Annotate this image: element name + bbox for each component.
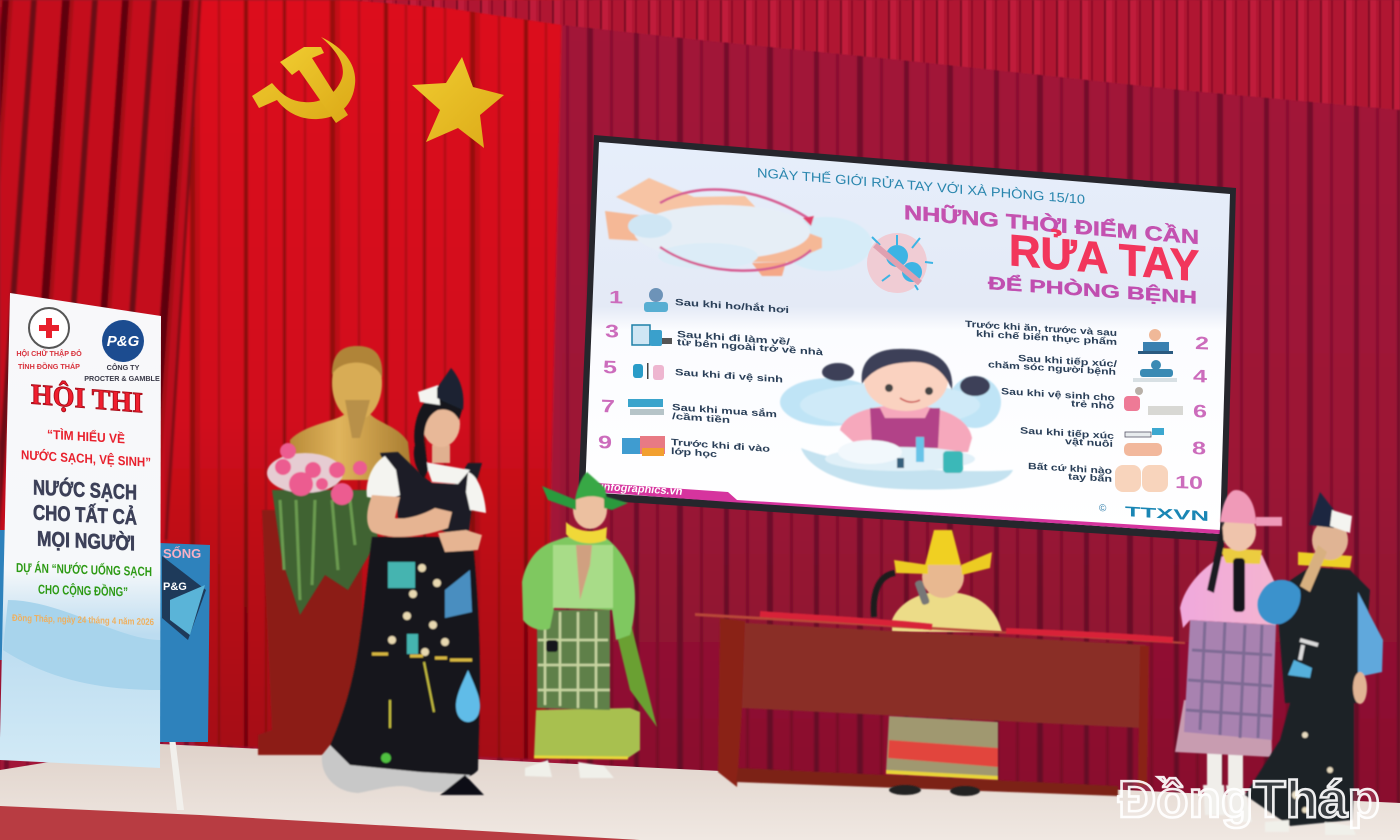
slogan: MỌI NGƯỜI	[37, 527, 135, 555]
item 10: 10	[1175, 472, 1203, 493]
item 10	[1028, 461, 1203, 493]
icon: gold star	[412, 57, 504, 148]
carpet	[0, 806, 640, 840]
item 6: 6	[1193, 401, 1207, 422]
backdrop board	[160, 543, 210, 742]
water waves	[3, 600, 160, 690]
item 8: vật nuôi	[1065, 436, 1113, 449]
performer: seated boy behind table	[874, 530, 1002, 632]
banner stand leg	[158, 640, 184, 810]
item 2: khi chế biến thực phẩm	[976, 329, 1117, 347]
backdrop board: P&G	[163, 581, 187, 593]
logo: red cross society	[29, 308, 69, 348]
illustration: washing hands	[605, 178, 872, 276]
logo text: P&G	[84, 363, 160, 383]
item 1	[609, 287, 789, 315]
item 9: lớp học	[671, 446, 717, 459]
item 3: 3	[605, 321, 619, 342]
list: right column	[965, 319, 1209, 493]
seated boy skirt	[886, 716, 998, 796]
item 6: Sau khi vệ sinh cho	[1001, 386, 1116, 403]
item 5: 5	[603, 357, 617, 378]
floor	[0, 744, 1400, 840]
icon: hammer and sickle	[252, 37, 355, 123]
item 9	[598, 432, 771, 459]
screen heading: ĐỂ PHÒNG BỆNH	[988, 272, 1197, 308]
item 8	[1020, 425, 1206, 459]
item 10: tay bẩn	[1068, 471, 1113, 484]
item 9: Trước khi đi vào	[671, 437, 771, 454]
logo: P&G	[102, 320, 144, 362]
item 7: Sau khi mua sắm	[672, 401, 777, 419]
logo text: red cross: HỘI CHỮ THẬP ĐỎ	[16, 349, 82, 358]
logo text: P&G: PROCTER & GAMBLE	[84, 374, 160, 383]
logo text: red cross: TỈNH ĐỒNG THÁP	[18, 361, 80, 371]
item 8: 8	[1192, 438, 1206, 459]
project name: DỰ ÁN “NƯỚC UỐNG SẠCH	[16, 560, 152, 579]
slogan: CHO TẤT CẢ	[33, 501, 137, 530]
item 4: 4	[1193, 366, 1208, 387]
item 1: Sau khi ho/hắt hơi	[675, 296, 789, 315]
bust of Ho Chi Minh	[290, 346, 412, 480]
item 1: 1	[609, 287, 623, 308]
podium	[258, 510, 362, 755]
item 4: chăm sóc người bệnh	[988, 359, 1117, 377]
contest name: “TÌM HIỂU VỀ	[47, 427, 125, 446]
item 4: Sau khi tiếp xúc/	[1018, 353, 1118, 369]
backdrop board: SỐNG	[163, 546, 201, 561]
screen heading: NHỮNG THỜI ĐIỂM CẦN	[904, 200, 1199, 249]
table	[695, 613, 1185, 796]
item 10: Bất cứ khi nào	[1028, 461, 1112, 476]
icon: virus crossed out	[867, 233, 933, 293]
banner	[0, 293, 161, 768]
project name: CHO CỘNG ĐỒNG”	[38, 582, 128, 599]
logo text: P&G: CÔNG TY	[107, 363, 140, 372]
item 3	[605, 321, 824, 357]
item 2	[965, 319, 1209, 354]
logo text: red cross	[16, 349, 82, 371]
project name	[16, 560, 152, 599]
dress decorations	[372, 562, 480, 763]
date: Đồng Tháp, ngày 24 tháng 4 năm 2026	[12, 613, 154, 628]
item 3: từ bên ngoài trở về nhà	[677, 337, 824, 357]
footer stripe: infographics.vn	[599, 481, 684, 498]
item 7: 7	[601, 396, 615, 417]
contest name: NƯỚC SẠCH, VỆ SINH”	[21, 447, 151, 470]
projection screen	[578, 135, 1236, 542]
list: left column	[598, 287, 824, 459]
screen heading: NGÀY THẾ GIỚI RỬA TAY VỚI XÀ PHÒNG 15/10	[757, 165, 1085, 207]
left edge board	[0, 530, 5, 660]
flower arrangement	[267, 443, 378, 615]
item 2: 2	[1195, 333, 1209, 354]
item 4	[988, 353, 1208, 387]
item 7	[601, 396, 777, 425]
screen heading: RỬA TAY	[1009, 224, 1199, 291]
performer: girl in pink costume	[1175, 490, 1282, 822]
screen heading	[757, 165, 1199, 308]
performer: girl in black dress	[322, 368, 486, 795]
contest name	[21, 427, 151, 470]
performer: boy in green costume	[522, 472, 657, 778]
performer: boy in black costume	[1245, 492, 1383, 835]
item 5: Sau khi đi vệ sinh	[675, 367, 784, 385]
slogan: NƯỚC SẠCH	[33, 475, 137, 505]
footer stripe: ©	[1099, 503, 1107, 514]
item 6	[1001, 386, 1207, 422]
item 7: /cầm tiền	[672, 411, 731, 425]
footer stripe: TTXVN	[1125, 503, 1209, 524]
item 9: 9	[598, 432, 612, 453]
item 6: trẻ nhỏ	[1071, 398, 1115, 411]
item 3: Sau khi đi làm về/	[677, 329, 791, 347]
footer stripe	[595, 481, 1220, 534]
slogan	[33, 475, 137, 555]
item 8: Sau khi tiếp xúc	[1020, 425, 1114, 441]
illustration: girl washing hands	[780, 349, 1013, 490]
watermark: Đồng Tháp: ĐồngTháp	[1118, 771, 1380, 829]
logo: P&G: P&G	[107, 333, 140, 350]
item 2: Trước khi ăn, trước và sau	[965, 319, 1117, 338]
curtain valance	[350, 0, 1400, 110]
item 5	[603, 357, 784, 385]
banner title: HỘI THI	[31, 378, 143, 419]
